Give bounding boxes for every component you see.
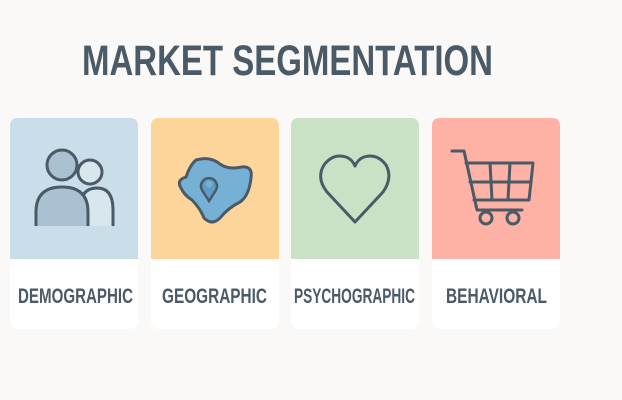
panel: psychographic	[291, 118, 419, 329]
label: psychographic: PSYCHOGRAPHIC	[294, 285, 415, 308]
title: MARKET SEGMENTATION	[82, 37, 493, 85]
icon: heart	[321, 156, 389, 222]
icon: map with pin	[179, 159, 251, 222]
panel: demographic	[10, 118, 138, 329]
icon: shopping cart	[452, 151, 533, 224]
panel: behavioral	[432, 118, 560, 329]
label: geographic: GEOGRAPHIC	[162, 285, 267, 308]
label: demographic: DEMOGRAPHIC	[18, 285, 133, 308]
icon: people	[36, 150, 113, 226]
panel: geographic	[151, 118, 279, 329]
label: behavioral: BEHAVIORAL	[446, 285, 547, 308]
